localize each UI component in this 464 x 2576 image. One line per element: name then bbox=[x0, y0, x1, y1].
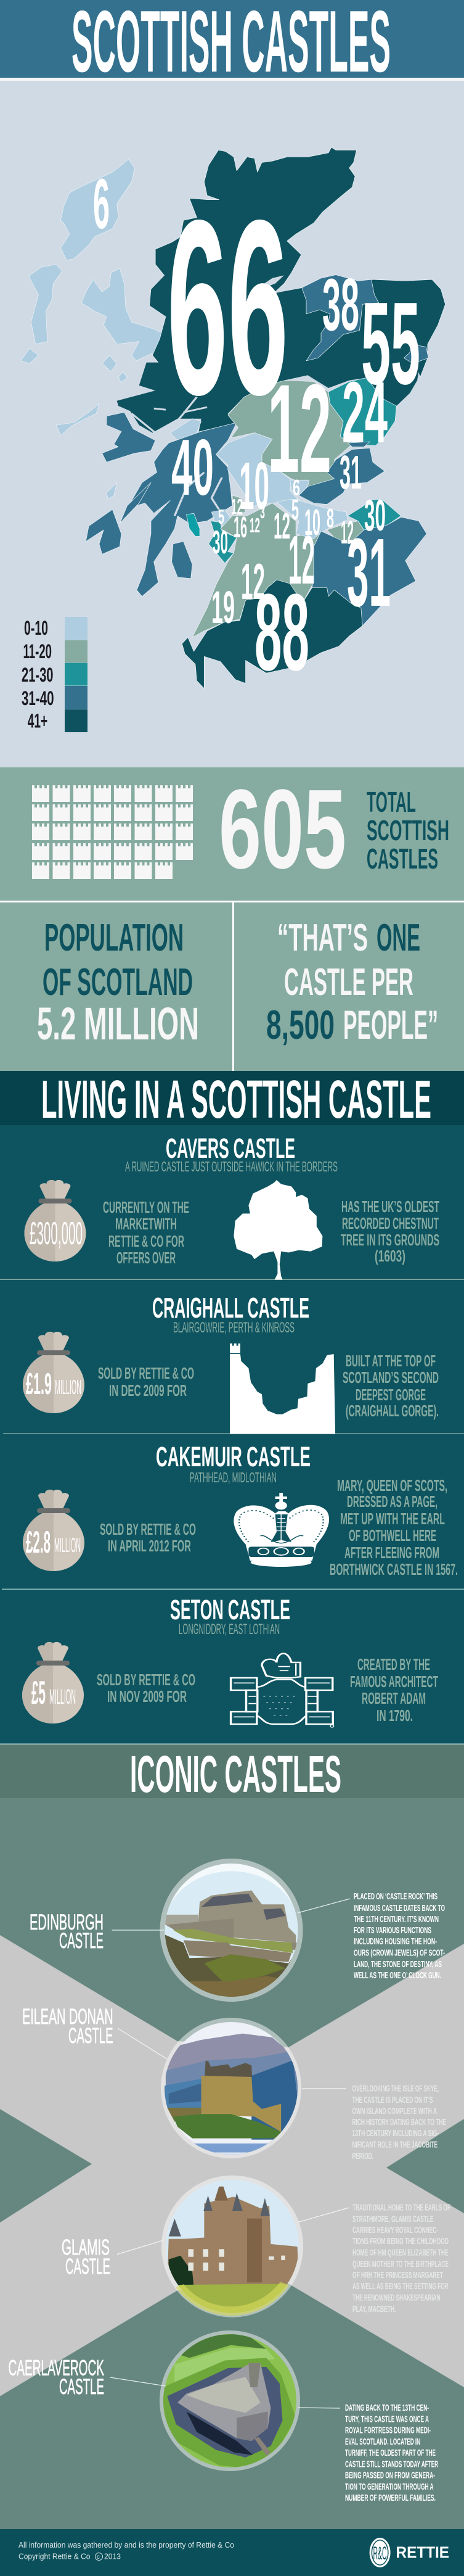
map regions: south bbox=[56, 363, 426, 688]
quote text bbox=[266, 916, 438, 1047]
Cakemuir Castle: MILLION bbox=[54, 1534, 81, 1556]
map castle counts: 6 bbox=[293, 475, 300, 500]
label: Glamis Castle bbox=[62, 2235, 110, 2279]
description: Glamis Castle bbox=[352, 2203, 450, 2314]
Cakemuir Castle: CAKEMUIR CASTLE bbox=[156, 1441, 311, 1472]
label: Edinburgh Castle: CASTLE bbox=[59, 1929, 104, 1953]
icon: money bag: £2.8 bbox=[26, 1525, 51, 1559]
connector lines: Eilean Donan bbox=[118, 2028, 346, 2089]
map regions: north bbox=[21, 147, 446, 382]
photo: Eilean Donan Castle bbox=[161, 2018, 301, 2160]
legend: 21-30 bbox=[22, 664, 53, 686]
population text: OF SCOTLAND bbox=[43, 960, 193, 1004]
label: Caerlaverock Castle: CAERLAVEROCK bbox=[9, 2356, 104, 2380]
label: Edinburgh Castle: EDINBURGH bbox=[30, 1910, 104, 1934]
total figure: 605 bbox=[219, 766, 346, 892]
description: Eilean Donan Castle bbox=[352, 2084, 446, 2161]
description: Caerlaverock Castle bbox=[345, 2403, 438, 2503]
Seton Castle bbox=[22, 1594, 438, 1727]
quote text: “THAT’S bbox=[277, 916, 368, 959]
population text bbox=[37, 916, 199, 1049]
label: Eilean Donan Castle bbox=[22, 2005, 113, 2048]
map castle counts: 40 bbox=[171, 423, 214, 512]
price text bbox=[103, 1198, 189, 1267]
map castle counts: 30 bbox=[364, 492, 386, 540]
footer text: Copyright Rettie & Co bbox=[18, 2553, 90, 2561]
price text bbox=[97, 1670, 195, 1706]
price text bbox=[98, 1364, 194, 1400]
price text: IN NOV 2009 FOR bbox=[107, 1687, 187, 1706]
icon: crown bbox=[234, 1493, 329, 1567]
map castle counts: 12 bbox=[231, 494, 243, 519]
map castle counts: 12 bbox=[288, 522, 315, 598]
price text: RETTIE & CO FOR bbox=[108, 1232, 184, 1250]
map castle counts: 6 bbox=[93, 165, 110, 244]
footer bbox=[0, 2529, 464, 2576]
map castle counts: 24 bbox=[342, 363, 388, 461]
footer text: c bbox=[97, 2554, 100, 2561]
map castle counts: 12 bbox=[274, 506, 290, 547]
footer text bbox=[18, 2541, 234, 2561]
map castle counts: 10 bbox=[304, 502, 320, 543]
map castle counts: 12 bbox=[241, 553, 265, 610]
fact text: IN 1790. bbox=[376, 1706, 413, 1725]
connector lines: Glamis bbox=[117, 2208, 349, 2254]
Seton Castle: SETON CASTLE bbox=[170, 1594, 290, 1625]
Craighall Castle: MILLION bbox=[55, 1376, 81, 1398]
description: Eilean Donan Castle: PERIOD. bbox=[352, 2151, 373, 2161]
price text: MARKETWITH bbox=[115, 1215, 177, 1233]
price text: IN APRIL 2012 FOR bbox=[108, 1537, 191, 1555]
map castle counts: 12 bbox=[341, 514, 354, 551]
fact text bbox=[341, 1197, 439, 1265]
description: Glamis Castle: PLAY, MACBETH. bbox=[352, 2304, 396, 2314]
fact text: (1603) bbox=[375, 1247, 405, 1265]
map castle counts: 30 bbox=[213, 524, 228, 561]
map castle counts: 5 bbox=[218, 505, 224, 528]
Craighall Castle: BLAIRGOWRIE, PERTH & KINROSS bbox=[173, 1319, 295, 1336]
panel: properties bbox=[0, 1125, 464, 1744]
footer text: 2013 bbox=[104, 2553, 121, 2561]
map castle counts: 38 bbox=[322, 263, 359, 346]
panel: map background bbox=[0, 81, 464, 767]
icon: gorge bbox=[230, 1344, 335, 1434]
quote text: ONE bbox=[376, 916, 420, 959]
map castle counts: 31 bbox=[340, 446, 362, 499]
price text: SOLD BY RETTIE & CO bbox=[98, 1364, 194, 1382]
label: Glamis Castle: GLAMIS bbox=[62, 2235, 110, 2260]
photo: Glamis Castle bbox=[160, 2175, 305, 2318]
Craighall Castle: CRAIGHALL CASTLE bbox=[152, 1292, 309, 1324]
panel: statistics bbox=[0, 766, 464, 1071]
description: Edinburgh Castle bbox=[354, 1891, 445, 1981]
icon: money bag bbox=[23, 1490, 84, 1571]
connector lines: Caerlaverock bbox=[110, 2377, 340, 2408]
logo: Rettie bbox=[370, 2538, 449, 2567]
legend: 0-10 bbox=[24, 617, 48, 639]
map castle counts: 5 bbox=[291, 493, 299, 526]
map castle counts: 3 bbox=[260, 501, 265, 522]
Cakemuir Castle bbox=[23, 1441, 458, 1579]
Cavers Castle: CAVERS CASTLE bbox=[166, 1133, 295, 1164]
quote text: 8,500 bbox=[266, 1002, 335, 1047]
fact text bbox=[343, 1352, 439, 1420]
legend: 41+ bbox=[28, 709, 47, 732]
Cavers Castle: £300,000 bbox=[30, 1216, 83, 1252]
icon: chestnut tree bbox=[234, 1180, 322, 1279]
icon: money bag bbox=[22, 1642, 84, 1724]
map of Scotland bbox=[21, 147, 446, 693]
Seton Castle: MILLION bbox=[49, 1685, 76, 1709]
fact text bbox=[350, 1655, 438, 1725]
map castle counts: 16 bbox=[234, 511, 247, 544]
legend: 31-40 bbox=[22, 687, 54, 709]
map castle counts: 12 bbox=[250, 514, 260, 537]
label: Caerlaverock Castle bbox=[9, 2356, 104, 2399]
label: Eilean Donan Castle: EILEAN DONAN bbox=[22, 2005, 113, 2029]
total label: TOTAL bbox=[367, 786, 416, 818]
Cavers Castle bbox=[25, 1133, 439, 1279]
photo: Caerlaverock Castle bbox=[160, 2330, 302, 2471]
legend: 11-20 bbox=[23, 640, 52, 663]
panel: iconic castles background bbox=[0, 1798, 464, 2529]
map castle counts: 10 bbox=[239, 448, 269, 524]
map castle counts bbox=[93, 165, 420, 693]
population text: 5.2 MILLION bbox=[37, 998, 199, 1049]
label: Edinburgh Castle bbox=[30, 1910, 104, 1953]
icon: floor plan bbox=[231, 1653, 334, 1727]
Seton Castle: LONGNIDDRY, EAST LOTHIAN bbox=[179, 1621, 280, 1638]
price text: IN DEC 2009 FOR bbox=[109, 1381, 187, 1400]
label: Glamis Castle: CASTLE bbox=[65, 2255, 110, 2279]
icon: money bag bbox=[23, 1332, 84, 1413]
photo: Edinburgh Castle bbox=[160, 1859, 303, 2002]
population text: POPULATION bbox=[44, 916, 184, 959]
map castle counts: 8 bbox=[327, 503, 334, 534]
logo: Rettie: R&C bbox=[373, 2543, 387, 2564]
price text: CURRENTLY ON THE bbox=[103, 1198, 189, 1216]
map castle counts: 31 bbox=[347, 519, 391, 627]
Craighall Castle bbox=[23, 1292, 439, 1434]
price text: OFFERS OVER bbox=[116, 1249, 176, 1267]
price text: SOLD BY RETTIE & CO bbox=[100, 1520, 196, 1538]
icon: money bag bbox=[25, 1180, 86, 1261]
logo: Rettie: RETTIE bbox=[396, 2544, 449, 2561]
legend bbox=[22, 617, 88, 732]
price text: SOLD BY RETTIE & CO bbox=[97, 1670, 195, 1689]
fact text bbox=[330, 1476, 458, 1579]
icon: money bag: £5 bbox=[31, 1675, 46, 1711]
footer text: All information was gathered by and is the property of Rettie & Co bbox=[18, 2541, 234, 2549]
map castle counts: 19 bbox=[211, 582, 235, 633]
icon: money bag: £1.9 bbox=[26, 1368, 52, 1401]
map castle counts: 88 bbox=[254, 571, 309, 693]
map castle counts: 66 bbox=[167, 168, 288, 447]
label: Eilean Donan Castle: CASTLE bbox=[68, 2024, 113, 2048]
total label bbox=[367, 786, 449, 875]
price text bbox=[100, 1520, 196, 1555]
connector lines: Edinburgh bbox=[112, 1899, 350, 1930]
map castle counts: 12 bbox=[267, 358, 332, 499]
icon grid: castles bbox=[32, 785, 193, 879]
label: Caerlaverock Castle: CASTLE bbox=[59, 2375, 104, 2399]
Cakemuir Castle: PATHHEAD, MIDLOTHIAN bbox=[190, 1469, 277, 1485]
